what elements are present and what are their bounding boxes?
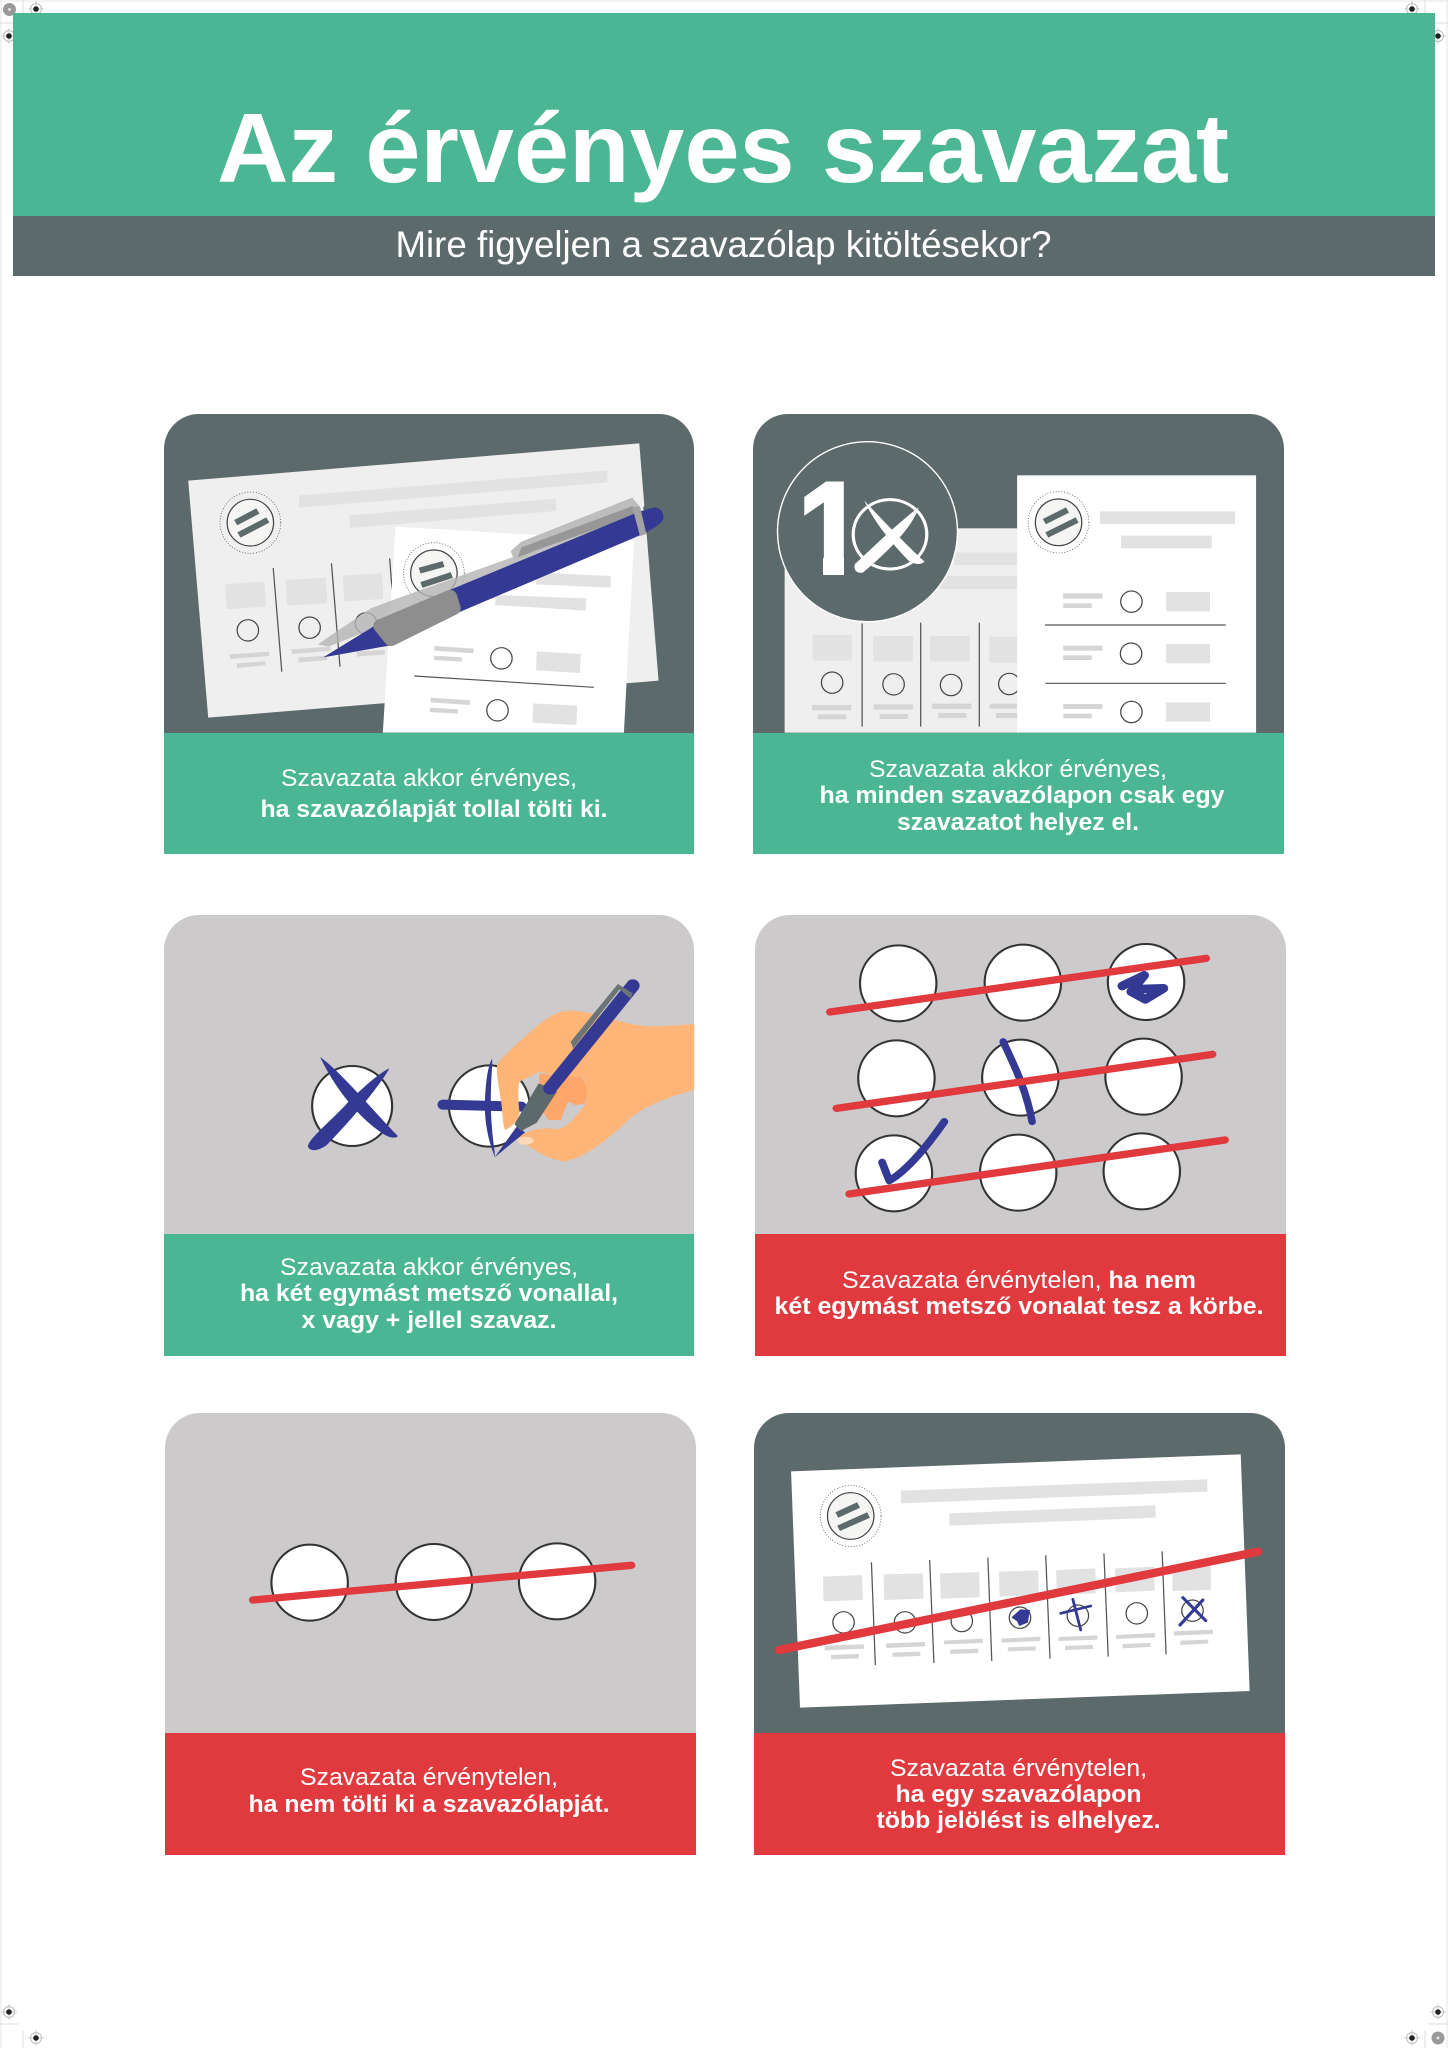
- red strike lines: [830, 958, 1225, 1194]
- pen: [318, 498, 663, 657]
- caption band: x vagy + jellel szavaz.: [302, 1307, 556, 1334]
- panel background: [164, 915, 694, 1234]
- caption band: ha nem tölti ki a szavazólapját.: [248, 1791, 610, 1818]
- icon: crossed circle: [853, 500, 927, 573]
- icon: scribble: [1122, 975, 1164, 999]
- illustration: hand marking circles: [308, 984, 694, 1162]
- illustration: ballots and pen: [188, 443, 663, 733]
- caption band: Szavazata érvénytelen, ha nem: [842, 1267, 1196, 1294]
- panel background: [164, 414, 694, 733]
- caption band: [164, 1234, 694, 1356]
- caption band: [753, 733, 1284, 854]
- caption band: több jelölést is elhelyez.: [876, 1807, 1160, 1834]
- header band: [13, 13, 1435, 216]
- caption band: ha két egymást metsző vonallal,: [240, 1280, 618, 1307]
- caption band: [164, 733, 694, 854]
- panel: unfilled: [165, 1413, 696, 1855]
- panel: invalid marks: [755, 915, 1286, 1356]
- caption band: Szavazata akkor érvényes,: [281, 765, 577, 792]
- caption band: Szavazata érvénytelen,: [890, 1755, 1147, 1782]
- illustration: three crossed circles: [253, 1543, 631, 1621]
- caption band: [165, 1733, 696, 1855]
- icon: pen: [495, 984, 633, 1157]
- icon: hand: [497, 1011, 694, 1162]
- caption band: szavazatot helyez el.: [897, 809, 1139, 836]
- title: Az érvényes szavazat: [217, 93, 1229, 203]
- number one: 1: [798, 455, 864, 601]
- caption band: Szavazata érvénytelen,: [300, 1764, 558, 1791]
- panel background: [753, 414, 1284, 733]
- panel background: [755, 915, 1286, 1234]
- caption band: [755, 1234, 1286, 1356]
- icon: check mark: [882, 1122, 944, 1181]
- icon: filled circle: [1011, 1609, 1030, 1626]
- caption band: Szavazata akkor érvényes,: [280, 1254, 578, 1281]
- subtitle: Mire figyeljen a szavazólap kitöltésekor?: [396, 224, 1052, 265]
- illustration: nine crossed circles: [830, 944, 1225, 1211]
- caption band: ha szavazólapját tollal tölti ki.: [260, 796, 608, 823]
- icon: single stroke: [1003, 1042, 1032, 1122]
- panel: pen: [164, 414, 694, 854]
- icon: x mark: [308, 1057, 398, 1150]
- illustration: struck ballot: [779, 1454, 1258, 1708]
- badge circle: [777, 442, 957, 622]
- icon: x mark: [1180, 1598, 1206, 1625]
- illustration: ballots: [777, 442, 1256, 733]
- caption band: két egymást metsző vonalat tesz a körbe.: [774, 1293, 1264, 1320]
- panel: x or plus: [164, 915, 694, 1356]
- caption band: ha minden szavazólapon csak egy: [820, 782, 1225, 809]
- icon: plus mark: [443, 1059, 530, 1157]
- red strike line: [779, 1552, 1258, 1650]
- icon: plus mark: [1061, 1599, 1091, 1630]
- caption band: Szavazata akkor érvényes,: [869, 756, 1167, 783]
- panel background: [754, 1413, 1285, 1733]
- panel background: [165, 1413, 696, 1733]
- panel: multiple marks: [754, 1413, 1285, 1855]
- caption band: [754, 1733, 1285, 1855]
- panel: one vote: [753, 414, 1284, 854]
- subtitle band: [13, 216, 1435, 276]
- caption band: ha egy szavazólapon: [896, 1781, 1142, 1808]
